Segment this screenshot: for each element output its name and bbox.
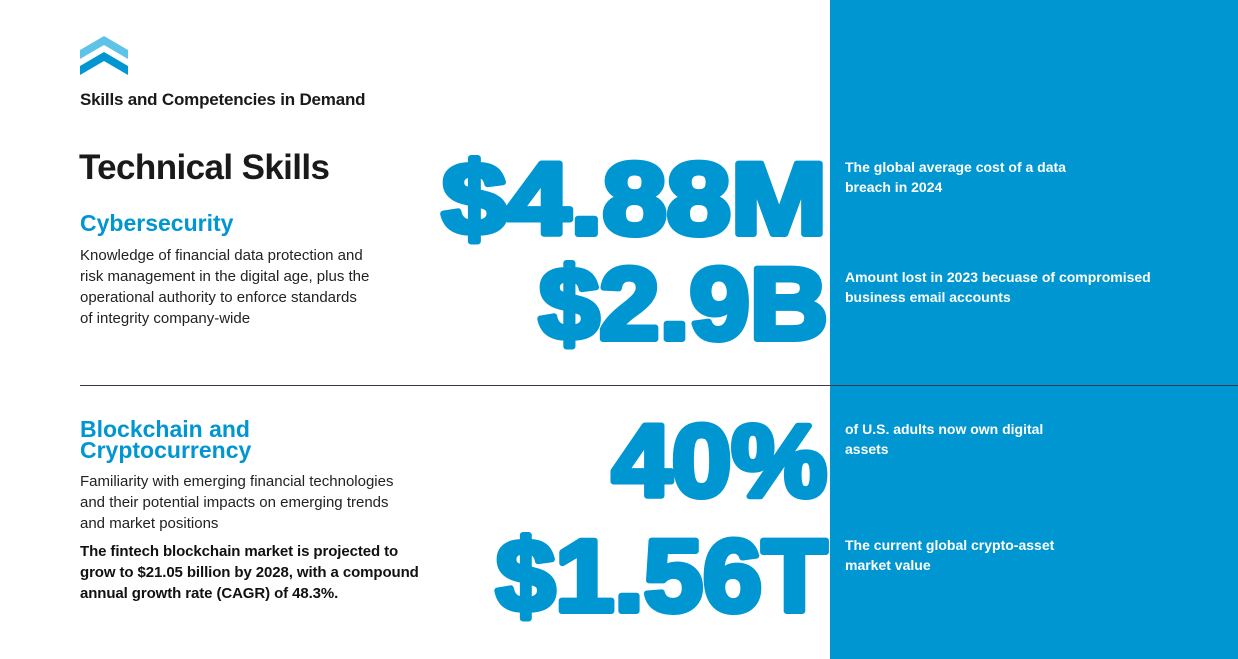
caption: digital assets: assets	[845, 441, 889, 457]
text: blockchain description: and market positions	[80, 515, 218, 532]
subheading: blockchain	[80, 416, 252, 463]
caption: email accounts	[845, 269, 1151, 305]
caption: digital assets	[845, 421, 1043, 457]
caption: crypto market: market value	[845, 557, 931, 573]
text: blockchain market stat: The fintech blockchain market is projected to	[80, 543, 398, 560]
caption: data breach	[845, 159, 1066, 195]
text: blockchain market stat: grow to $21.05 billion by 2028, with a compound	[80, 564, 419, 581]
text: cybersecurity description: operational authority to enforce standards	[80, 289, 357, 306]
text: blockchain market stat	[80, 543, 419, 602]
stat: 2.9B: $2.9B	[539, 247, 828, 361]
subheading: cybersecurity: Cybersecurity	[80, 210, 233, 236]
stat: 1.56T: $1.56T	[496, 519, 827, 633]
stat: 4.88M: $4.88M	[442, 142, 827, 256]
text: cybersecurity description: of integrity company-wide	[80, 310, 250, 327]
text: blockchain market stat: annual growth rate (CAGR) of 48.3%.	[80, 585, 338, 602]
subheading: blockchain: Blockchain and	[80, 416, 250, 442]
panel: blockchain	[80, 416, 419, 602]
caption: email accounts: business email accounts	[845, 289, 1011, 305]
text: blockchain description: Familiarity with emerging financial technologies	[80, 473, 393, 490]
divider	[80, 385, 1238, 386]
caption: data breach: breach in 2024	[845, 179, 942, 195]
caption: crypto market: The current global crypto-asset	[845, 537, 1054, 553]
caption: email accounts: Amount lost in 2023 becuase of compromised	[845, 269, 1151, 285]
text: cybersecurity description: risk management in the digital age, plus the	[80, 268, 369, 285]
icon: chevrons	[80, 36, 128, 75]
text: cybersecurity description: Knowledge of financial data protection and	[80, 247, 363, 264]
text: blockchain description	[80, 473, 393, 532]
heading: technical skills: Technical Skills	[79, 148, 329, 187]
blue panel	[830, 0, 1238, 659]
caption: digital assets: of U.S. adults now own digital	[845, 421, 1043, 437]
text: blockchain description: and their potential impacts on emerging trends	[80, 494, 389, 511]
panel: cybersecurity	[80, 210, 369, 327]
section label: Skills and Competencies in Demand	[80, 90, 365, 109]
stat: 40%: 40%	[612, 404, 827, 518]
subheading: blockchain: Cryptocurrency	[80, 437, 251, 463]
caption: data breach: The global average cost of a data	[845, 159, 1066, 175]
caption: crypto market	[845, 537, 1054, 573]
text: cybersecurity description	[80, 247, 369, 327]
